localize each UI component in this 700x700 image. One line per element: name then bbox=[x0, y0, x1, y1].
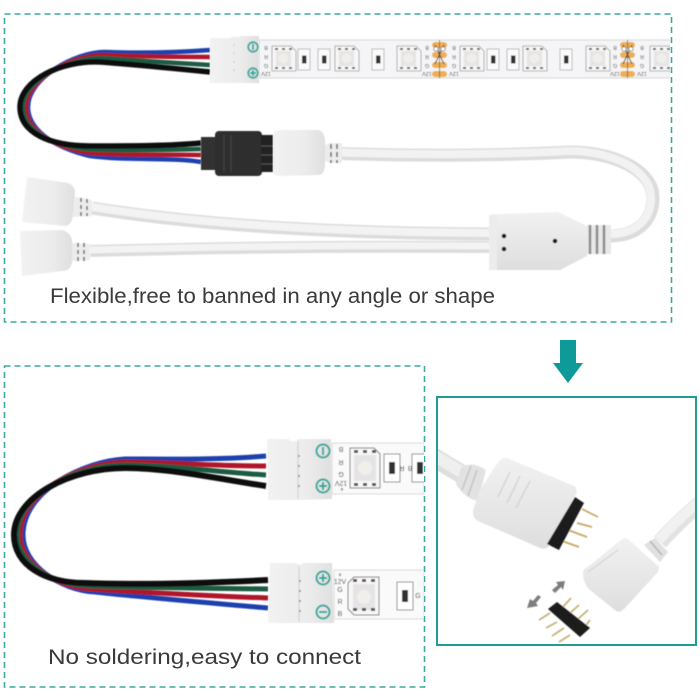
white female connector: on coupler bbox=[273, 130, 342, 176]
LED strip: top: B bbox=[613, 44, 617, 50]
icon: minus bbox=[248, 42, 258, 52]
LED strip: lower segment: R bbox=[337, 599, 343, 606]
LED strip: lower segment: G bbox=[415, 593, 421, 600]
panel border: lower dashed frame bbox=[4, 366, 424, 687]
clip connector: lower bbox=[268, 563, 334, 623]
LED strip: lower segment: 12V bbox=[334, 579, 347, 586]
LED strip: top: 12V bbox=[637, 70, 647, 76]
female connector and cable bbox=[583, 500, 700, 612]
clip connector: top strip bbox=[210, 36, 259, 83]
LED strip: top: 12V bbox=[422, 70, 432, 76]
LED strip: upper segment: R bbox=[338, 458, 344, 465]
black header pins bbox=[539, 598, 590, 642]
LED strip: top bbox=[259, 40, 674, 78]
LED strip: upper segment: B bbox=[338, 445, 343, 452]
panel: no soldering bbox=[4, 366, 428, 687]
LED strip: upper segment: 12V bbox=[334, 479, 347, 486]
LED strip: top: R bbox=[452, 53, 456, 59]
white female connector: lower end bbox=[20, 230, 90, 276]
LED strip: lower segment: B bbox=[338, 611, 343, 618]
white cable loop bbox=[340, 151, 653, 236]
LED strip: upper segment: R bbox=[399, 464, 405, 471]
LED strip: upper segment: B bbox=[407, 464, 412, 471]
LED strip: upper segment: G bbox=[338, 470, 344, 477]
LED strip: top: R bbox=[264, 53, 268, 59]
clip connector: upper bbox=[267, 439, 332, 500]
icon: plus bbox=[248, 68, 258, 78]
LED strip: top: R bbox=[640, 53, 644, 59]
LED strip: top: R bbox=[425, 53, 429, 59]
panel: flexible cable bbox=[4, 14, 674, 322]
LED strip: lower segment: G bbox=[337, 587, 343, 594]
LED strip: upper segment bbox=[332, 443, 428, 494]
LED strip: top: B bbox=[640, 44, 644, 50]
icon: arrows bbox=[527, 581, 565, 608]
LED strip: top: B bbox=[452, 44, 456, 50]
LED strip: lower segment: + bbox=[338, 572, 342, 579]
LED strip: top: G bbox=[640, 62, 644, 68]
LED strip: top: G bbox=[264, 62, 268, 68]
RGB wires: top loop bbox=[20, 50, 210, 162]
LED strip: top: G bbox=[452, 62, 456, 68]
icon: plus bbox=[316, 572, 330, 584]
Y splitter bbox=[489, 212, 611, 270]
panel border: solid frame bbox=[437, 397, 696, 645]
icon: minus bbox=[316, 606, 330, 618]
LED strip: top: B bbox=[264, 44, 268, 50]
caption: no soldering: No soldering,easy to connect bbox=[48, 646, 361, 669]
LED strip: top: R bbox=[613, 53, 617, 59]
LED strip: top: B bbox=[425, 44, 429, 50]
icon: plus bbox=[316, 480, 330, 492]
panel: connector close-up bbox=[430, 397, 700, 645]
black coupler bbox=[201, 131, 273, 176]
male connector and cable bbox=[430, 453, 598, 550]
RGB wires: lower loop bbox=[14, 456, 268, 608]
panel border: top dashed frame bbox=[4, 14, 672, 322]
caption: flexible: Flexible,free to banned in any angle or shape bbox=[50, 285, 495, 308]
LED strip: top: G bbox=[425, 62, 429, 68]
white female connector: upper end bbox=[22, 177, 92, 226]
pins bbox=[562, 509, 598, 547]
white split cables bbox=[90, 207, 490, 251]
LED strip: top: 12V bbox=[261, 70, 271, 76]
arrow: down bbox=[553, 340, 583, 383]
LED strip: top: 12V bbox=[449, 70, 459, 76]
LED strip: lower segment bbox=[334, 570, 424, 619]
icon: minus bbox=[316, 444, 330, 458]
LED strip: upper segment: + bbox=[340, 485, 344, 492]
LED strip: top: G bbox=[613, 62, 617, 68]
LED strip: top: 12V bbox=[610, 70, 620, 76]
